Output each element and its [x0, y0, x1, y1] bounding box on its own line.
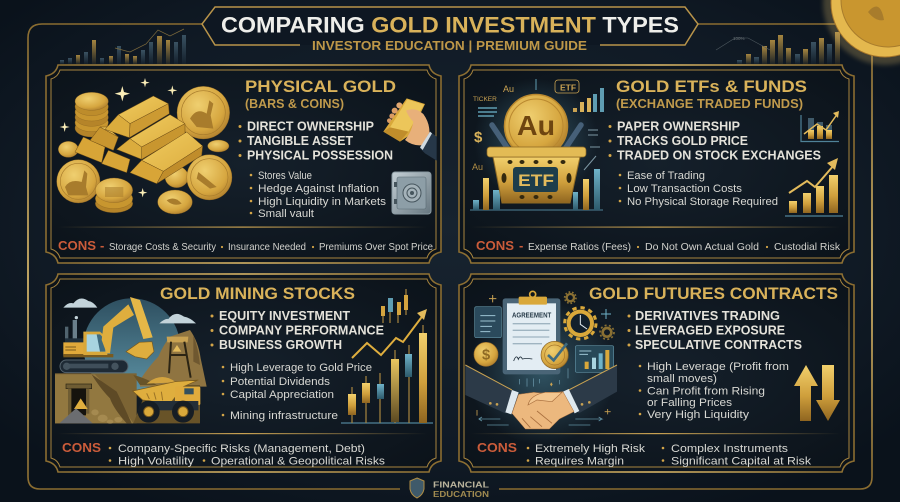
illustration: ETF basket with Au coin: Au: [503, 84, 514, 94]
illustration: ETF basket with Au coin: TICKER: [473, 96, 497, 103]
illustration: ETF basket with Au coin: ETF: [560, 82, 576, 92]
list: key features: LEVERAGED EXPOSURE: [635, 324, 785, 338]
illustration: agreement and handshake: $: [482, 348, 490, 364]
heading: GOLD ETFs & FUNDS: [616, 77, 807, 96]
list: benefits: Mining infrastructure: [230, 410, 338, 422]
cons: Complex Instruments: [671, 443, 788, 455]
cons: Storage Costs & Security: [109, 242, 217, 253]
icon: hand holding gold bar: [383, 98, 437, 161]
list: benefits: High Leverage to Gold Price: [230, 362, 372, 374]
list: benefits: Potential Dividends: [230, 376, 330, 388]
cons: -: [519, 238, 523, 253]
cons: High Volatility: [118, 456, 195, 468]
footer badge: financial education: [410, 478, 489, 499]
cons: CONS: [62, 440, 101, 455]
list: key features: [210, 309, 384, 352]
list: key features: TRADED ON STOCK EXCHANGES: [617, 148, 821, 162]
list: key features: DERIVATIVES TRADING: [635, 309, 780, 323]
list: benefits: Hedge Against Inflation: [258, 183, 379, 195]
cons: [62, 440, 385, 468]
list: key features: SPECULATIVE CONTRACTS: [635, 338, 802, 352]
cons: [476, 238, 841, 253]
cons: Custodial Risk: [774, 242, 841, 253]
cons: Premiums Over Spot Price: [319, 242, 433, 253]
cons: Significant Capital at Risk: [671, 456, 812, 468]
cons: Company-Specific Risks (Management, Debt): [118, 443, 365, 455]
list: benefits: Stores Value: [258, 170, 312, 182]
icon: small growth chart: [801, 111, 839, 142]
illustration: ETF basket with Au coin: [470, 78, 604, 210]
cons: Extremely High Risk: [535, 443, 646, 455]
list: key features: [628, 309, 802, 352]
chart: rising gold bars: [785, 158, 843, 216]
illustration: ETF basket with Au coin: $: [474, 129, 483, 146]
list: benefits: Small vault: [258, 208, 314, 220]
list: benefits: or Falling Prices: [647, 397, 732, 409]
title banner: [202, 7, 698, 53]
chart: candlesticks with rising arrow: [341, 289, 433, 423]
illustration: ETF basket with Au coin: Au: [472, 162, 483, 172]
cons: Expense Ratios (Fees): [528, 242, 631, 253]
icon: large corner coin: [823, 0, 900, 65]
illustration: ETF basket with Au coin: ETF: [518, 171, 554, 190]
heading: GOLD MINING STOCKS: [160, 284, 355, 303]
illustration: agreement and handshake: AGREEMENT: [512, 313, 552, 320]
list: key features: COMPANY PERFORMANCE: [219, 324, 384, 338]
subtitle: INVESTOR EDUCATION | PREMIUM GUIDE: [312, 39, 587, 53]
list: key features: BUSINESS GROWTH: [219, 338, 342, 352]
list: benefits: No Physical Storage Required: [627, 196, 778, 208]
icon: up and down arrows: [794, 365, 840, 421]
cons: CONS: [476, 238, 514, 253]
subheading: (EXCHANGE TRADED FUNDS): [616, 97, 803, 111]
illustration: agreement and handshake: [465, 291, 617, 445]
list: benefits: Very High Liquidity: [647, 409, 750, 421]
list: benefits: High Leverage (Profit from: [647, 361, 789, 373]
panel: gold mining stocks: [46, 274, 441, 472]
list: benefits: [639, 361, 789, 421]
icon: safe vault: [392, 172, 431, 214]
cons: CONS: [58, 238, 96, 253]
list: key features: EQUITY INVESTMENT: [219, 309, 350, 323]
list: key features: PAPER OWNERSHIP: [617, 120, 740, 134]
list: key features: TANGIBLE ASSET: [247, 134, 353, 148]
list: benefits: Can Profit from Rising: [647, 386, 765, 398]
footer text: FINANCIAL: [433, 480, 489, 490]
cons: Requires Margin: [535, 456, 624, 468]
cons: Operational & Geopolitical Risks: [211, 456, 385, 468]
cons: [58, 238, 433, 253]
list: key features: DIRECT OWNERSHIP: [247, 120, 374, 134]
chart: background bars left: [60, 29, 186, 64]
cons: Do Not Own Actual Gold: [645, 242, 759, 253]
cons: -: [100, 238, 104, 253]
chart: background bars right: 100%: [733, 36, 745, 41]
subheading: (BARS & COINS): [245, 97, 344, 111]
list: key features: PHYSICAL POSSESSION: [247, 148, 393, 162]
panel: physical gold: [46, 65, 441, 263]
list: benefits: High Liquidity in Markets: [258, 196, 386, 208]
list: benefits: Ease of Trading: [627, 170, 705, 182]
icon: shield: [410, 478, 424, 498]
list: benefits: [250, 170, 386, 220]
illustration: mining excavator and truck: [55, 297, 207, 424]
list: benefits: small moves): [647, 373, 717, 385]
illustration: ETF basket with Au coin: Au: [517, 110, 555, 141]
list: benefits: [222, 362, 372, 422]
cons: CONS: [477, 440, 517, 455]
heading: PHYSICAL GOLD: [245, 77, 396, 96]
panel: gold ETFs and funds: [459, 65, 854, 263]
footer text: EDUCATION: [433, 489, 489, 499]
list: key features: [238, 120, 393, 162]
list: key features: [608, 120, 821, 162]
cons: Insurance Needed: [228, 242, 306, 253]
list: benefits: [619, 170, 778, 208]
cons: [477, 440, 812, 468]
title: COMPARING GOLD INVESTMENT TYPES: [221, 12, 679, 38]
list: key features: TRACKS GOLD PRICE: [617, 134, 748, 148]
heading: GOLD FUTURES CONTRACTS: [589, 284, 838, 303]
panel: gold futures contracts: [459, 274, 854, 472]
list: benefits: Capital Appreciation: [230, 389, 334, 401]
illustration: gold bars and coins: [57, 78, 232, 214]
chart: background bars right: [716, 32, 840, 64]
list: benefits: Low Transaction Costs: [627, 183, 742, 195]
